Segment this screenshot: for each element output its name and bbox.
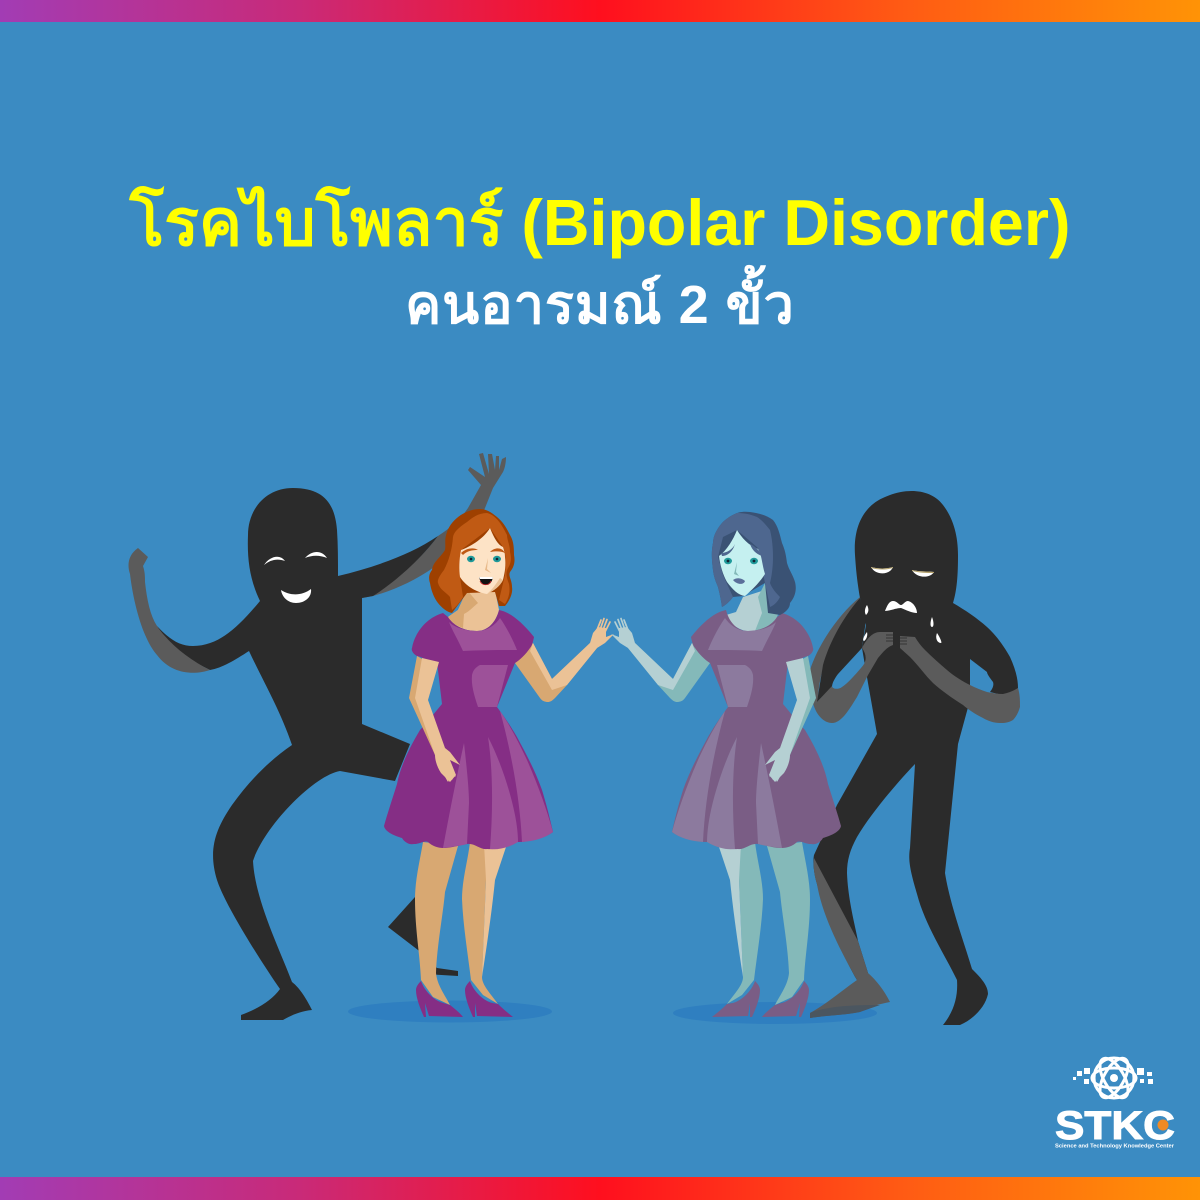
left arm sliver xyxy=(809,597,860,703)
front arm and hand xyxy=(765,656,816,782)
dress xyxy=(672,610,841,849)
back arm and hand xyxy=(515,618,614,702)
happy woman xyxy=(384,509,614,1017)
legs xyxy=(415,842,458,1005)
right forearm and hand xyxy=(900,636,1020,723)
logo orange dot xyxy=(1158,1120,1168,1130)
logo atom mark xyxy=(1092,1054,1136,1102)
gray back leg xyxy=(810,858,890,1018)
logo wordmark: STKC xyxy=(1055,1104,1175,1148)
legs xyxy=(767,842,810,1005)
crying eyes, mouth and tears xyxy=(863,567,941,643)
face xyxy=(459,528,505,594)
foot shade xyxy=(810,1005,880,1018)
bottom gradient bar xyxy=(0,1177,1200,1200)
shoes xyxy=(762,981,809,1017)
logo side dots xyxy=(1073,1068,1153,1084)
back foot xyxy=(388,897,458,976)
laughing eyes and mouth xyxy=(264,552,327,603)
neck xyxy=(726,590,778,632)
body xyxy=(813,491,1018,1025)
facial features xyxy=(461,548,505,585)
dress xyxy=(384,610,553,849)
facial features xyxy=(721,544,762,584)
STKC logo xyxy=(1055,1054,1175,1150)
sad woman xyxy=(611,512,841,1017)
hair xyxy=(712,512,796,615)
left forearm and hand xyxy=(813,632,893,723)
top gradient bar xyxy=(0,0,1200,22)
crying shadow figure xyxy=(809,491,1020,1025)
face xyxy=(719,530,765,596)
finger gaps xyxy=(886,635,907,644)
front arm and hand xyxy=(409,656,460,782)
floor shadow: right woman xyxy=(673,1002,877,1024)
hair xyxy=(429,509,515,613)
logo tagline: Science and Technology Knowledge Center xyxy=(1055,1144,1175,1150)
back arm and hand xyxy=(628,643,710,702)
shoes xyxy=(416,981,463,1017)
subtitle: คนอารมณ์ 2 ขั้ว xyxy=(405,275,795,335)
neck xyxy=(448,590,499,631)
title: โรคไบโพลาร์ (Bipolar Disorder) xyxy=(130,187,1070,259)
left arm dark wedge xyxy=(817,598,866,702)
floor shadow: left woman xyxy=(348,1000,552,1022)
laughing shadow figure xyxy=(129,453,506,1020)
